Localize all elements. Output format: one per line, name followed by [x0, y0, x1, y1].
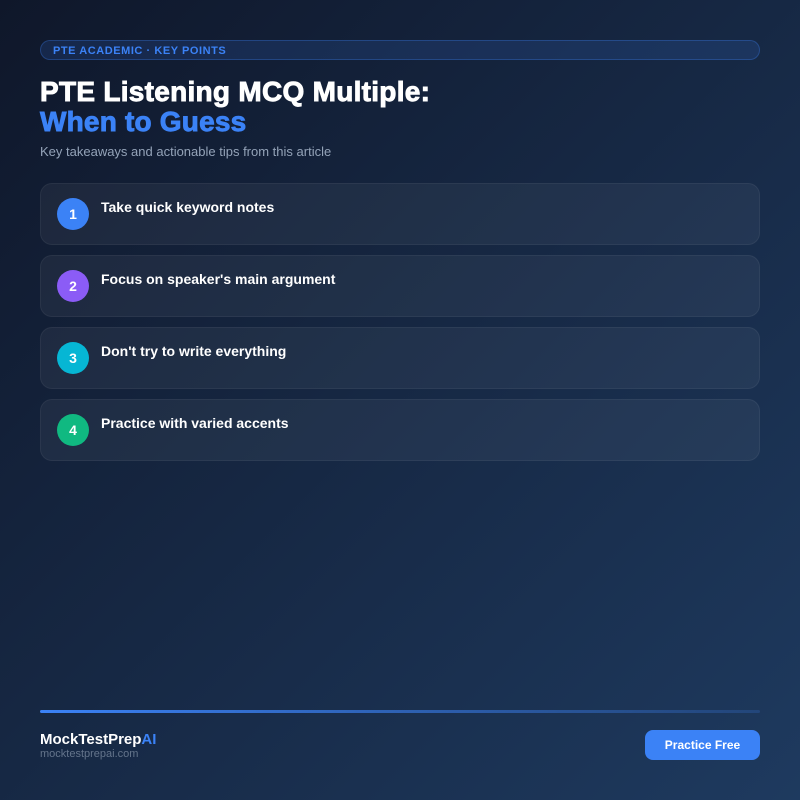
title: PTE Listening MCQ Multiple:: [40, 76, 430, 107]
website url: mocktestprepai.com: [40, 748, 138, 760]
panel: key point 3: [40, 327, 760, 389]
panel: key point 2: [40, 255, 760, 317]
button: practice free: Practice Free: [665, 738, 740, 752]
number badge 1: [57, 198, 89, 230]
badge: PTE Academic key points: PTE ACADEMIC · KEY POINTS: [53, 45, 226, 57]
badge: PTE Academic key points: [40, 40, 760, 60]
key point 3 text: Don't try to write everything: [101, 343, 286, 359]
button: practice free: [645, 730, 760, 760]
number badge 3: [57, 342, 89, 374]
subtitle: Key takeaways and actionable tips from this article: [40, 144, 331, 159]
title: [40, 76, 430, 137]
key point 4 text: Practice with varied accents: [101, 415, 289, 431]
panel: key point 4: [40, 399, 760, 461]
number badge 2: 2: [69, 278, 77, 294]
key point 2 text: Focus on speaker's main argument: [101, 271, 335, 287]
footer divider line: [40, 710, 760, 713]
number badge 2: [57, 270, 89, 302]
panel: key point 1: [40, 183, 760, 245]
number badge 1: 1: [69, 206, 77, 222]
brand name: MockTestPrepAI: [40, 731, 156, 748]
key point 1 text: Take quick keyword notes: [101, 199, 274, 215]
title: When to Guess: [40, 106, 246, 137]
number badge 4: 4: [69, 422, 77, 438]
number badge 3: 3: [69, 350, 77, 366]
number badge 4: [57, 414, 89, 446]
